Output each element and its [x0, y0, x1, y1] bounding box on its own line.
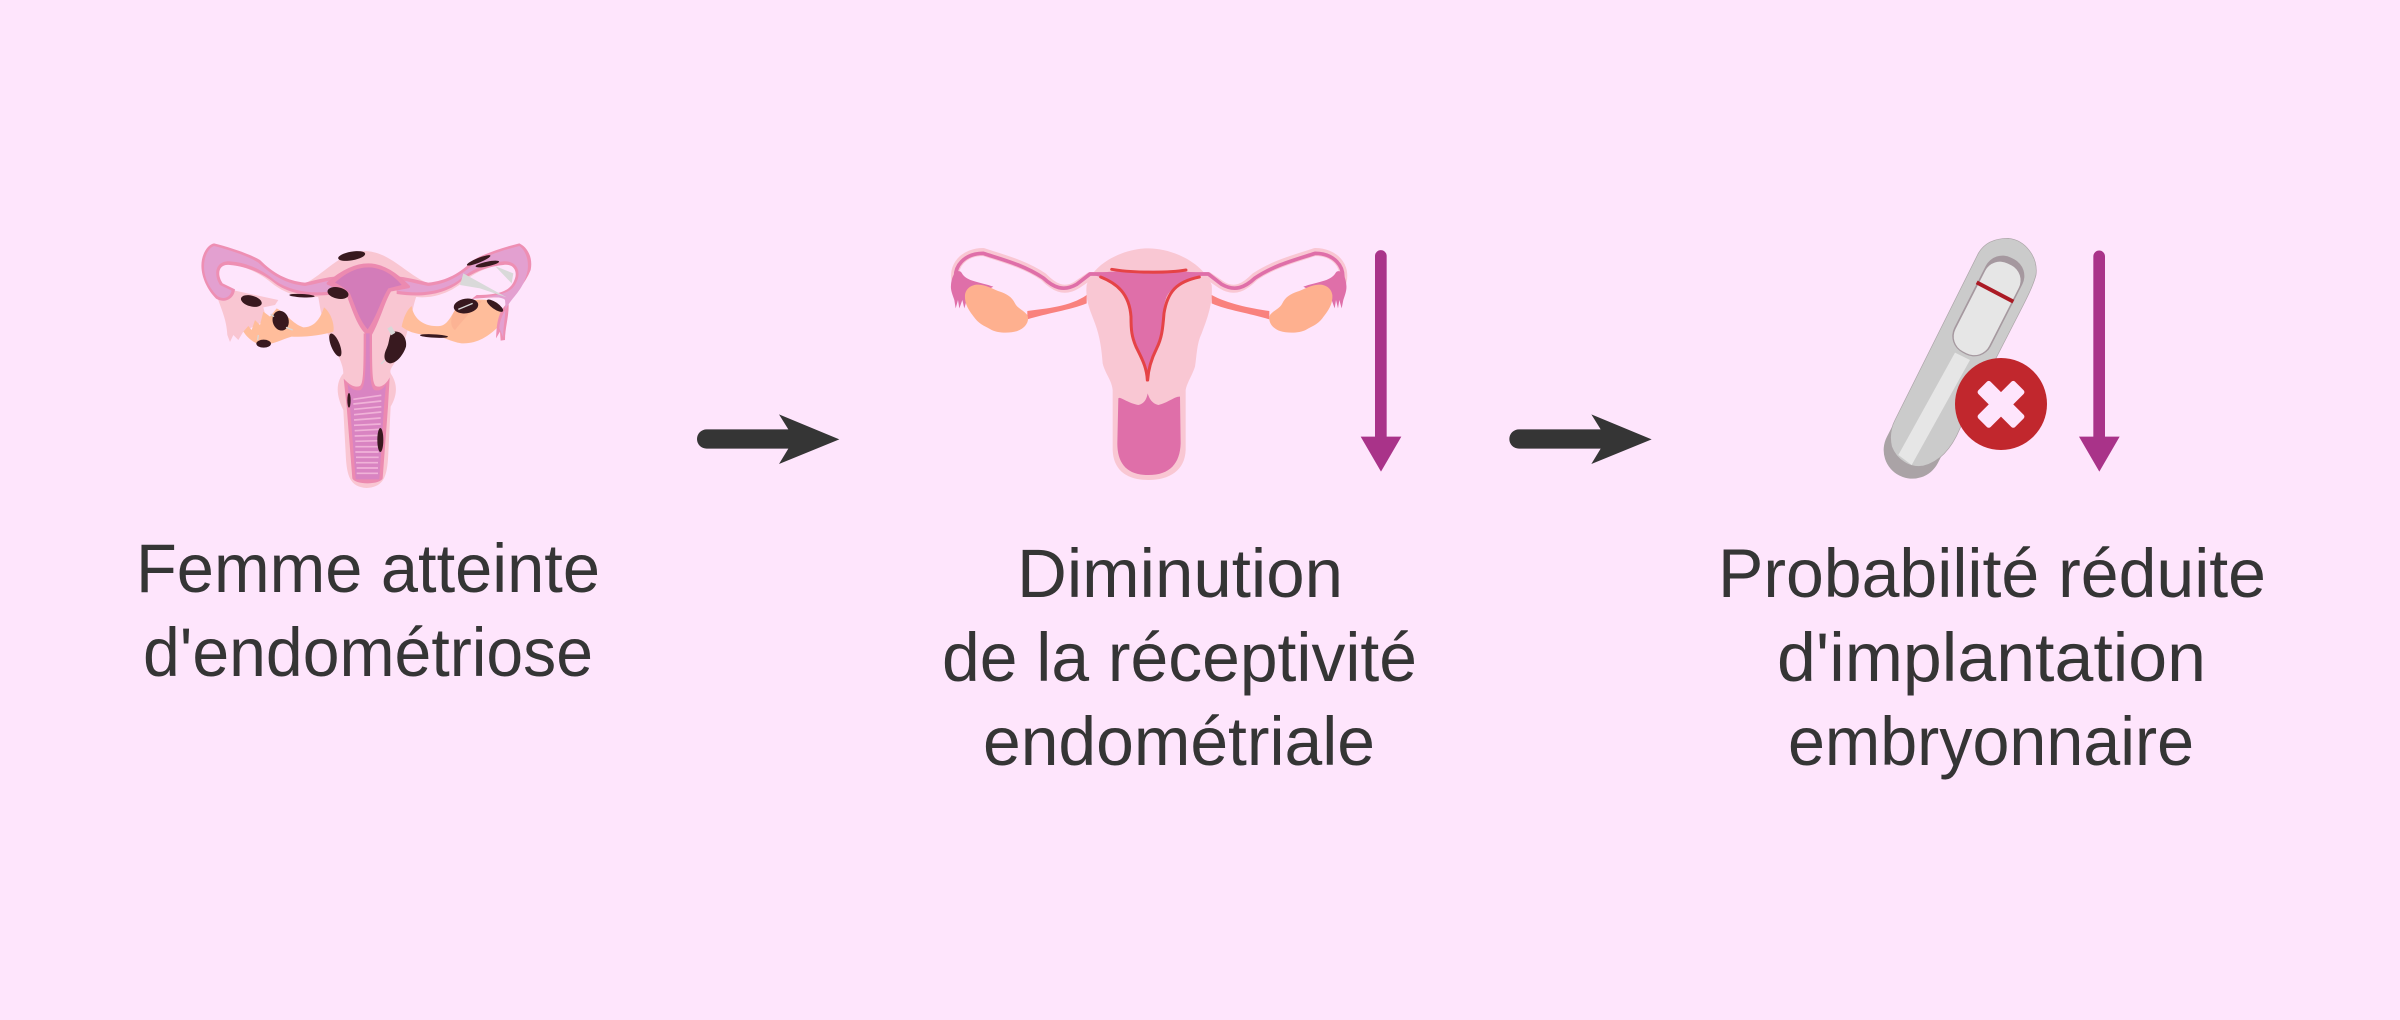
- test shadow: [1912, 357, 1960, 450]
- text: reduced embryo implantation probability: [1718, 535, 2266, 780]
- vaginal ridges: [353, 395, 381, 473]
- tube ends: [951, 271, 1346, 308]
- test body: [1891, 238, 2036, 466]
- uterine cavity: [1090, 271, 1208, 380]
- text: woman with endometriosis: Femme atteinte: [136, 530, 600, 607]
- ovaries: [965, 285, 1332, 333]
- text: reduced embryo implantation probability: d'implantation: [1777, 619, 2206, 696]
- text: reduced embryo implantation probability: Probabilité réduite: [1718, 535, 2266, 612]
- right ovary and ligament: [402, 300, 503, 343]
- endometrium red lines: [1101, 269, 1199, 380]
- uterus body: [1086, 248, 1212, 480]
- lesion highlights: [258, 303, 473, 364]
- left ovary and ligament: [243, 307, 334, 345]
- uterine cavity: [328, 265, 408, 335]
- uterus body: [305, 251, 428, 488]
- tube halos: [221, 263, 513, 296]
- fallopian tubes: [201, 243, 337, 301]
- red circle with cross: [1955, 358, 2047, 450]
- text: reduced embryo implantation probability: embryonnaire: [1788, 703, 2194, 780]
- arrow: purple down arrow 1: [1361, 250, 1401, 472]
- icon: pregnancy test with red cross: [1891, 238, 2047, 466]
- text: woman with endometriosis: d'endométriose: [143, 614, 593, 691]
- icon: uterus with endometriosis: [201, 243, 531, 488]
- arrow: black arrow 1: [697, 414, 839, 464]
- arrow: black arrow 2: [1509, 414, 1652, 464]
- test stripe: [1898, 353, 1970, 465]
- text: decreased endometrial receptivity: endométriale: [983, 703, 1375, 780]
- vagina: [1117, 393, 1181, 475]
- vagina and cervical canal: [344, 333, 390, 483]
- icon: uterus normal: [951, 248, 1346, 480]
- endometriosis lesions: [240, 249, 505, 452]
- fallopian tubes: [955, 252, 1343, 289]
- text: woman with endometriosis: [136, 530, 600, 691]
- ligaments: [1027, 295, 1269, 319]
- adhesions: [460, 266, 513, 297]
- test window: [1946, 249, 2031, 363]
- left fimbriae: [217, 291, 278, 342]
- text: decreased endometrial receptivity: de la réceptivité: [942, 619, 1417, 696]
- text: decreased endometrial receptivity: [942, 535, 1417, 780]
- test result line: [1977, 282, 2013, 302]
- text: decreased endometrial receptivity: Diminution: [1017, 535, 1343, 612]
- arrow: purple down arrow 2: [2079, 250, 2120, 472]
